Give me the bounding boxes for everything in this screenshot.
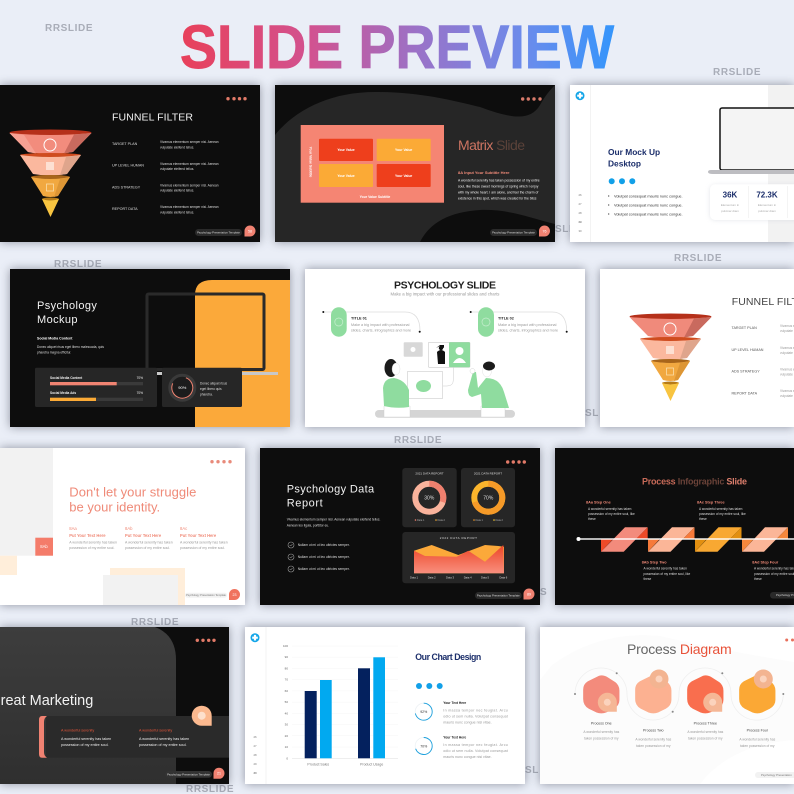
step: process two: A wonderful serenity has (635, 738, 672, 742)
panel: chart design slide (245, 627, 525, 784)
donut chart 30%: Data 2 (438, 519, 445, 522)
slide numbers: 26 (578, 193, 582, 197)
funnel chart (630, 314, 712, 401)
callout band: A wonderful serenity (61, 728, 94, 732)
checklist: Nullam ut mi ut leo ultricies semper. (298, 543, 350, 547)
step: process four: taken possession of my (740, 744, 775, 748)
column 3: 8Ac (180, 526, 187, 531)
funnel labels: vulputate eleifend tellus. (160, 210, 194, 214)
progress card: Social Media Ads (50, 391, 76, 395)
funnel labels: vulputate (780, 394, 793, 398)
heading: Mockup (37, 314, 78, 326)
bar chart: 0 (286, 756, 288, 760)
heading: Process Infographic Slide (642, 476, 747, 486)
page badge (214, 768, 224, 779)
illustration: two people and brain board (375, 342, 515, 418)
slide numbers: 27 (578, 202, 582, 206)
step: process one (583, 677, 620, 740)
step: process three (687, 677, 724, 740)
slide numbers (253, 735, 257, 775)
connector dots (574, 672, 784, 713)
step two: these (644, 577, 652, 581)
heading: Don't let your struggle (69, 485, 196, 500)
step three (697, 500, 746, 521)
text block 1 (443, 701, 508, 724)
callout band (39, 716, 229, 758)
progress card: 70% (137, 376, 143, 380)
donut chart 30%: Data 1 (417, 519, 425, 522)
funnel labels: ADS STRATEGY (112, 186, 141, 190)
funnel labels: vulputate eleifend tellus. (160, 167, 194, 171)
heading: Psychology (37, 300, 97, 312)
heading: Matrix Slide (458, 137, 525, 153)
area chart: Data 6 (499, 576, 508, 580)
watermarks: RRSLIDE (394, 435, 442, 446)
donut chart 30% (402, 468, 457, 527)
laptop mockup (147, 294, 278, 375)
pagination dots (506, 460, 526, 464)
text block 1: odio ut sem nulla. Volutpat consequat (443, 714, 508, 718)
funnel labels: Vivamus elementum semper nisi. Aenean (160, 162, 219, 166)
column 2: Put Your Text Here (125, 533, 162, 538)
title: SLIDE PREVIEW (180, 13, 614, 81)
text block: Aenean leo ligula, porttitor eu. (287, 524, 329, 528)
page badge: 58 (248, 229, 252, 233)
watermarks: RRSLIDE (713, 67, 761, 78)
step one: 8Aa Step One (586, 500, 611, 504)
area chart: Data 4 (464, 576, 472, 580)
panel: matrix slide (275, 85, 555, 242)
pagination dots (210, 460, 232, 463)
step: process two: taken possession of my (636, 744, 671, 748)
footer pill: Psychology Presentation Template (167, 772, 210, 776)
step two: possession of my entire soul, like (644, 572, 690, 576)
step four: 8Ad Step Four (752, 560, 779, 564)
callout: title 02: Make a big impact with professional (498, 323, 557, 327)
text block: Social Media Content (37, 336, 73, 340)
step: process one: A wonderful serenity has (583, 730, 620, 734)
slide numbers: 27 (253, 744, 257, 748)
text block 2: In massa tempor nec feugiat. Arcu (443, 743, 508, 747)
footer pill: Psychology Presentation (761, 773, 792, 777)
funnel labels: vulputate (780, 372, 793, 376)
text block 2: odio ut sem nulla. Volutpat consequat (443, 749, 508, 753)
column 2: possession of my entire soul. (125, 546, 170, 550)
heading (608, 149, 660, 168)
funnel labels (732, 324, 794, 398)
pagination dots (196, 639, 216, 642)
pagination dots (785, 638, 794, 642)
bar chart: 60 (285, 689, 288, 693)
column 1: A wonderful serenity has taken (69, 540, 117, 544)
panel: funnel filter dark slide (0, 85, 260, 242)
pagination dots (521, 97, 542, 101)
funnel labels: vulputate (780, 351, 793, 355)
donut card: pharetra. (200, 392, 213, 396)
funnel labels: Vivamus elementum semper nisi. Aenean (160, 140, 219, 144)
icon: medical cross (576, 91, 584, 100)
watermarks: RRSLIDE (45, 23, 93, 34)
text block 1: In massa tempor nec feugiat. Arcu (443, 708, 508, 712)
step: process two (635, 670, 672, 748)
callout: title 02: TITLE 02 (498, 316, 514, 320)
decorative dots (416, 683, 443, 689)
text block: Vivamus elementum semper nisi. Aenean vulputate eleifend tellus. (287, 518, 380, 522)
column 2: A wonderful serenity has taken (125, 540, 173, 544)
slide numbers: 30 (578, 229, 582, 233)
funnel labels: UP LEVEL HUMAN (732, 348, 764, 352)
donut chart 70%: 70% (483, 496, 494, 502)
column 3 (180, 526, 228, 550)
stats card: 72.3K (756, 191, 778, 200)
step two: A wonderful serenity has taken (644, 566, 687, 570)
heading: Our Mock Up (608, 147, 660, 157)
funnel labels: REPORT DATA (112, 207, 138, 211)
column 1: possession of my entire soul. (69, 546, 114, 550)
area chart: Data 3 (446, 576, 454, 580)
step three: A wonderful serenity has taken (699, 507, 743, 511)
bar chart: 80 (285, 666, 288, 670)
area chart: 2022 DATA REPORT (440, 536, 478, 540)
step one: these (588, 517, 596, 521)
callout band: possession of my entire soul. (61, 743, 109, 747)
bar chart: 90 (285, 655, 288, 659)
footer pill (475, 592, 522, 599)
slide numbers: 28 (578, 211, 582, 215)
stats card: pulvinar diam (758, 209, 776, 213)
area chart: Data 2 (428, 576, 436, 580)
watermarks: SL (525, 765, 539, 776)
callout band: possession of my entire soul. (139, 743, 187, 747)
progress ring 92%: 92% (420, 710, 427, 714)
callout: title 01 (322, 307, 421, 337)
column 1: 8Aa (69, 526, 77, 531)
progress card (35, 368, 157, 407)
panel: mock up desktop slide (570, 85, 794, 242)
heading: Report (287, 498, 323, 510)
panel: psychology mockup slide (10, 269, 290, 427)
matrix chart: Your Value (337, 174, 355, 178)
bar chart: 20 (285, 734, 288, 738)
callout: title 01: TITLE 01 (351, 316, 367, 320)
donut card: Donec aliquet risus (200, 382, 228, 386)
watermarks: RRSLIDE (131, 617, 179, 628)
footer pill: Psychology Presentation Template (492, 231, 535, 235)
text block 1: Your Text Here (443, 701, 466, 705)
column 2: 8Ab (125, 526, 133, 531)
text block (287, 518, 380, 528)
heading (287, 484, 375, 510)
connector path (575, 668, 783, 720)
step: process four: A wonderful serenity has (739, 738, 776, 742)
bar chart: 10 (285, 745, 288, 749)
heading: Our Chart Design (415, 652, 481, 662)
progress card: 70% (137, 391, 143, 395)
funnel labels: vulputate (780, 329, 793, 333)
funnel labels: vulputate eleifend tellus. (160, 146, 194, 150)
bar chart: 30 (285, 723, 288, 727)
bar chart (283, 644, 398, 766)
decorative dots (609, 178, 635, 184)
bullet list: Volutpat consequat mauris nunc congue. (614, 194, 683, 198)
matrix chart (301, 125, 444, 203)
text block: Donec aliquet risus eget libero malesuada, quis (37, 345, 104, 349)
callout: title 01: slides, charts, infographics and more (351, 328, 411, 332)
step three: possession of my entire soul, like (699, 512, 746, 516)
slide numbers: 29 (578, 220, 582, 224)
footer pill (490, 229, 537, 236)
stats card: Elementum in (758, 203, 777, 207)
donut chart 70% (461, 468, 515, 527)
watermarks: RRSLIDE (54, 259, 102, 270)
step two (642, 560, 690, 581)
matrix chart: Your Value Subtitle (360, 195, 390, 199)
text block: A wonderful serenity has taken possession of my entire (458, 178, 540, 182)
funnel labels: REPORT DATA (732, 392, 758, 396)
column 3: possession of my entire soul. (180, 546, 225, 550)
panel: process diagram slide (540, 627, 794, 784)
stats card (710, 184, 794, 220)
funnel labels: Vivamus elementum semper nisi. Aenean (160, 205, 219, 209)
column 1 (69, 526, 117, 550)
text block (458, 170, 540, 201)
callout: title 01: Make a big impact with professional (351, 323, 410, 327)
heading: PSYCHOLOGY SLIDE (394, 280, 496, 292)
page badge (244, 226, 256, 236)
heading: Desktop (608, 159, 641, 169)
callout band: A wonderful serenity (139, 728, 172, 732)
funnel labels: TARGET PLAN (732, 326, 757, 330)
panel: psychology illustration slide (305, 269, 585, 427)
progress card: Social Media Content (50, 376, 83, 380)
step two: 8Ab Step Two (642, 560, 667, 564)
step: process four (739, 670, 776, 748)
text block: with my whole heart. I am alone, and feel the charm of (458, 191, 538, 195)
footer pill (195, 229, 242, 236)
donut chart 70%: Data 1 (476, 519, 483, 522)
label tag: 8Ab (40, 544, 48, 549)
slide numbers: 26 (253, 735, 257, 739)
page badge: 23 (232, 593, 236, 597)
column 2 (125, 526, 173, 550)
panel: process infographic slide (555, 448, 794, 605)
step three: these (699, 517, 707, 521)
funnel labels: TARGET PLAN (112, 142, 138, 146)
bullet list (608, 194, 683, 216)
funnel labels (112, 140, 219, 214)
donut card (162, 368, 242, 407)
bar chart: Product Sales (307, 762, 329, 766)
panel: data report slide (260, 448, 540, 605)
page badge (229, 589, 240, 600)
text block 1: mauris nunc congue nisi vitae. (443, 720, 492, 724)
step: process two: Process Two (643, 729, 664, 733)
step one (586, 500, 635, 521)
panel: great marketing slide (0, 627, 229, 784)
checklist: Nullam ut mi ut leo ultricies semper. (298, 555, 350, 559)
icon: medical cross (250, 633, 260, 642)
callout: title 02: slides, charts, infographics and more (498, 328, 558, 332)
callout band: A wonderful serenity has taken (139, 737, 189, 741)
progress ring 92% (415, 703, 432, 720)
funnel labels: ADS STRATEGY (732, 370, 760, 374)
page badge: 76 (542, 229, 546, 233)
text block 2: Your Text Here (443, 736, 466, 740)
stats card: Elementum in (721, 203, 740, 207)
bar chart: 40 (285, 711, 288, 715)
watermarks: SLI (555, 224, 572, 235)
slide numbers (578, 194, 582, 232)
panel: struggle quote slide (0, 448, 245, 605)
heading (37, 300, 97, 326)
funnel labels: vulputate eleifend tellus. (160, 188, 194, 192)
subtitle: Make a big impact with our professional slides and charts (391, 292, 499, 296)
step: process four: Process Four (747, 729, 769, 733)
footer pill (185, 593, 227, 598)
bar chart: 50 (285, 700, 288, 704)
footer pill: Psychology Presentation Template (186, 593, 226, 597)
step: process three: Process Three (694, 722, 717, 726)
process ribbons (576, 527, 794, 552)
area chart: Data 5 (481, 576, 489, 580)
step three: 8Ac Step Three (697, 500, 725, 504)
step: process three: A wonderful serenity has (687, 730, 724, 734)
donut chart 70%: 2021 DATA REPORT (474, 472, 502, 476)
heading: FUNNEL FILTER (112, 112, 193, 124)
watermarks: S (540, 587, 547, 598)
step one: A wonderful serenity has taken (588, 507, 632, 511)
text block (37, 336, 104, 355)
laptop mockup (708, 108, 794, 174)
label tag (35, 538, 53, 556)
callout: title 02 (470, 307, 568, 337)
funnel chart (10, 130, 92, 217)
stats card: 36K (723, 191, 738, 200)
text block: soul, like these sweet mornings of spring which I enjoy (458, 184, 539, 188)
progress ring 70% (415, 738, 432, 754)
donut chart 70%: Data 2 (496, 519, 503, 522)
bullet list: Volutpat consequat mauris nunc congue. (614, 204, 683, 208)
footer pill (165, 771, 212, 778)
funnel labels: UP LEVEL HUMAN (112, 164, 144, 168)
step four: these (754, 577, 762, 581)
heading: Process Diagram (627, 641, 732, 657)
icon badge (192, 706, 212, 726)
funnel labels: Vivamus elementum semper nisi. Aenean (160, 184, 219, 188)
checklist (288, 542, 350, 572)
slide numbers: 30 (253, 771, 257, 775)
step: process three: taken possession of my (688, 736, 723, 740)
step one: possession of my entire soul, like (588, 512, 635, 516)
watermarks: RRSLIDE (674, 253, 722, 264)
bar chart: 70 (285, 678, 288, 682)
step four (752, 560, 794, 581)
slide numbers: 28 (253, 753, 257, 757)
step: process one: taken possession of my (584, 736, 619, 740)
page badge (524, 588, 534, 600)
slide numbers: 29 (253, 762, 257, 766)
area chart: Data 1 (410, 576, 418, 580)
text block: existence in this spot, which was created for the bliss (458, 197, 537, 201)
column 3: Put Your Text Here (180, 533, 217, 538)
donut card: 90% (178, 385, 187, 390)
callout band: A wonderful serenity has taken (61, 737, 111, 741)
matrix chart: Your Value (337, 148, 355, 152)
pagination dots (226, 97, 247, 100)
matrix chart: Your Value (395, 148, 412, 152)
donut chart 30%: 2021 DATA REPORT (415, 472, 444, 476)
donut card: eget libero quis (200, 387, 222, 391)
footer pill: Psychology Presentation Template (197, 231, 240, 235)
heading: Psychology Data (287, 484, 375, 496)
column 1: Put Your Text Here (69, 533, 106, 538)
text block: pharetra magna efficitur. (37, 351, 72, 355)
bullet list: Volutpat consequat mauris nunc congue. (614, 212, 683, 216)
bar chart: Product Usage (360, 762, 383, 766)
stats card: pulvinar diam (721, 209, 739, 213)
watermarks: SL (585, 408, 599, 419)
area chart (402, 532, 515, 583)
matrix chart: Your Value (395, 174, 412, 178)
step: process one: Process One (591, 722, 612, 726)
progress ring 70%: 70% (420, 744, 427, 748)
panel: funnel filter light slide (600, 269, 794, 427)
heading (69, 485, 196, 515)
text block: 8A Input Your Subtitle Here (458, 170, 510, 175)
footer pill: Psychology Presentation Template (477, 594, 520, 598)
footer pill (770, 592, 794, 598)
page badge: 89 (527, 592, 531, 596)
checklist: Nullam ut mi ut leo ultricies semper. (298, 567, 350, 571)
page badge: 21 (217, 772, 221, 776)
column 3: A wonderful serenity has taken (180, 540, 228, 544)
text block 2: mauris nunc congue nisi vitae. (443, 755, 492, 759)
bar chart: 100 (283, 644, 288, 648)
text block 2 (443, 736, 508, 759)
matrix chart: Your Value Subtitle (308, 147, 312, 177)
donut chart 30%: 30% (424, 496, 435, 502)
heading: be your identity. (69, 500, 160, 515)
page badge (539, 226, 550, 236)
footer pill (755, 772, 794, 778)
